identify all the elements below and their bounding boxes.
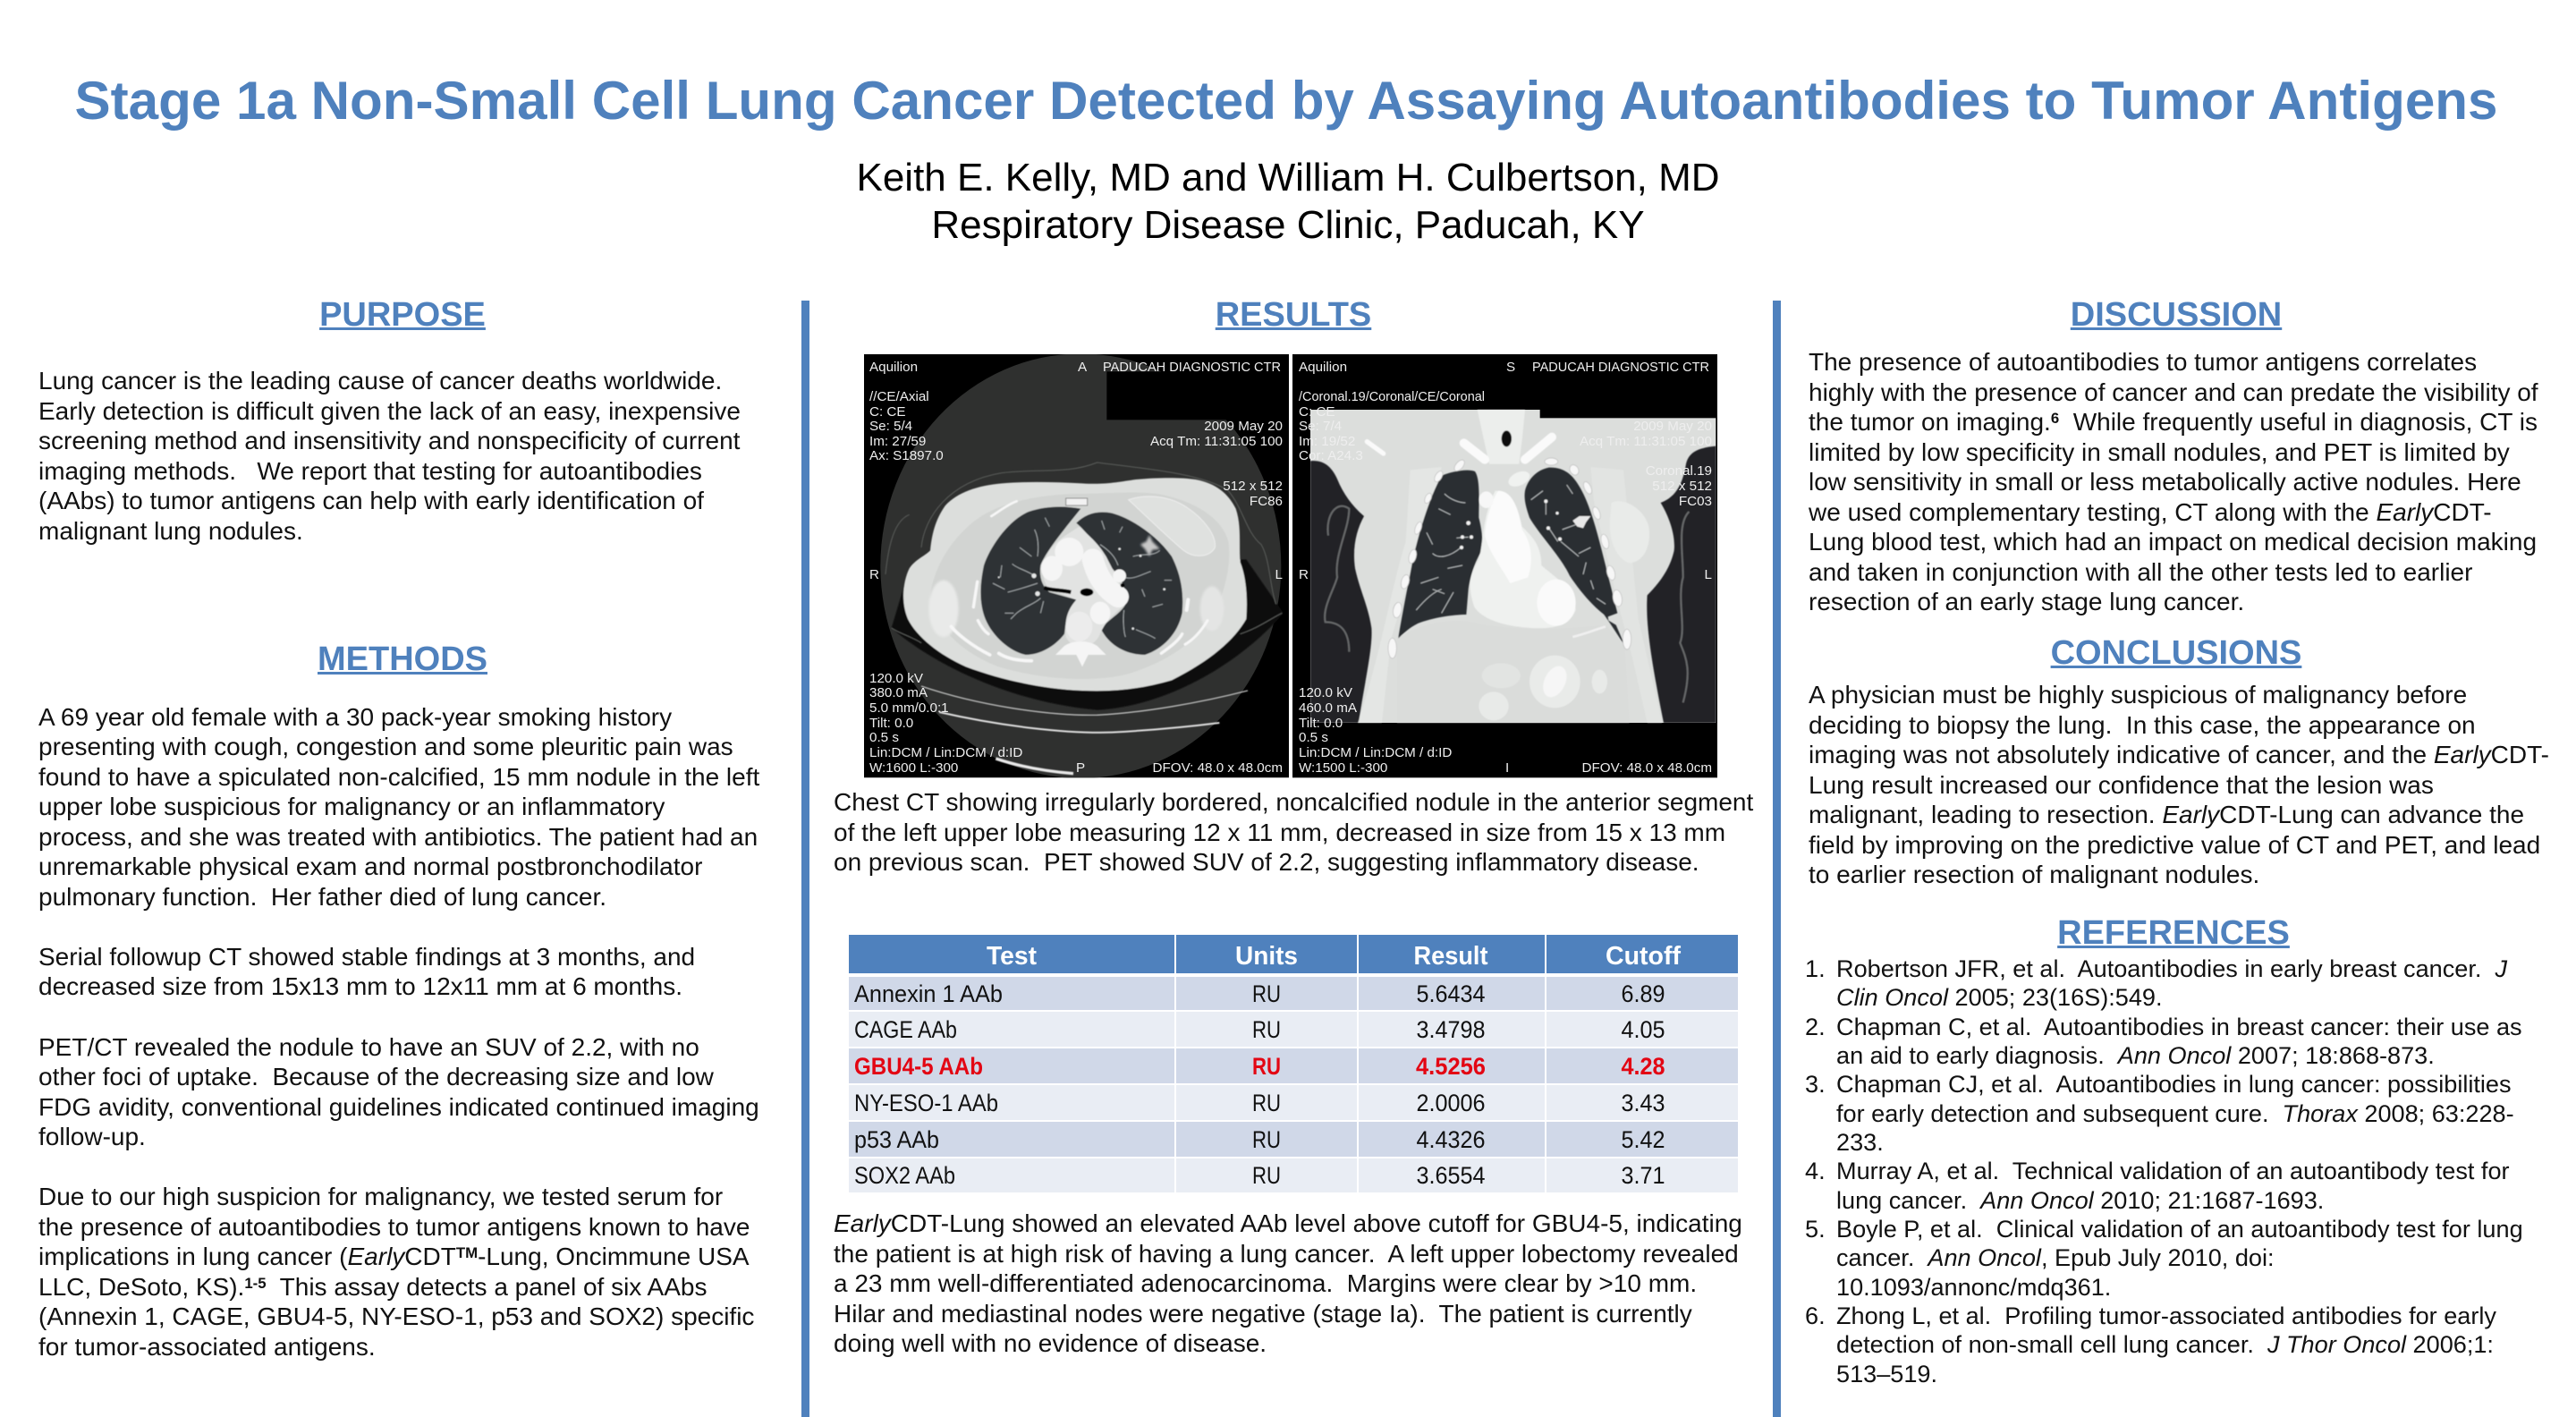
CT annotations: W:1500 L:-300 xyxy=(1299,760,1387,776)
panel: discussion xyxy=(1809,296,2538,615)
table rows: 3.43 xyxy=(1621,1090,1665,1116)
CT annotations: /Coronal.19/Coronal/CE/Coronal xyxy=(1299,389,1485,404)
CT annotations: W:1600 L:-300 xyxy=(869,760,958,776)
heading: results: RESULTS xyxy=(1216,296,1371,334)
dark side regions xyxy=(1310,461,1372,723)
text: methods body: A 69 year old female with a 30 pack-year smoking history presenting with cough, congestion and some pleuritic pain was found to have a spiculated non-calcified, 15 mm nodule in the left upper lobe suspicious for malignancy or an inflammatory process, and she was treated with antibiotics. The patient had an unremarkable physical exam and normal postbronchodilator pulmonary function. Her father died of lung cancer. Serial followup CT showed stable findings at 3 months, and decreased size from 15x13 mm to 12x11 mm at 6 months. PET/CT revealed the nodule to have an SUV of 2.2, with no other foci of uptake. Because of the decreasing size and low FDG avidity, conventional guidelines indicated continued imaging follow-up. Due to our high suspicion for malignancy, we tested serum for the presence of autoantibodies to tumor antigens known to have implications in lung cancer (EarlyCDTTM-Lung, Oncimmune USA LLC, DeSoto, KS).1-5 This assay detects a panel of six AAbs (Annexin 1, CAGE, GBU4-5, NY-ESO-1, p53 and SOX2) specific for tumor-associated antigens. xyxy=(38,703,759,1361)
text: reference list: Robertson JFR, et al. Autoantibodies in early breast cancer. J Clin Oncol 2005; 23(16S):549. Chapman C, et al. Autoantibodies in breast cancer: their use as an aid to early diagnosis. Ann Oncol 2007; 18:868-873. Chapman CJ, et al. Autoantibodies in lung cancer: possibilities for early detection and subsequent cure. Thorax 2008; 63:228- 233. Murray A, et al. Technical validation of an autoantibody test for lung cancer. Ann Oncol 2010; 21:1687-1693. Boyle P, et al. Clinical validation of an autoantibody test for lung cancer. Ann Oncol, Epub July 2010, doi: 10.1093/annonc/mdq361. Zhong L, et al. Profiling tumor-associated antibodies for early detection of non-small cell lung cancer. J Thor Oncol 2006;1: 513–519. xyxy=(1836,955,2523,1387)
arm veins xyxy=(1325,506,1689,702)
lung vessels xyxy=(993,518,1172,639)
CT annotations: 460.0 mA xyxy=(1299,700,1358,716)
table rows: 4.4326 xyxy=(1417,1126,1485,1153)
panel: methods xyxy=(38,641,760,1361)
heading: methods: METHODS xyxy=(318,641,487,678)
table rows: 2.0006 xyxy=(1417,1090,1485,1116)
CT annotations: 2009 May 20 xyxy=(1204,419,1283,434)
CT annotations: PADUCAH DIAGNOSTIC CTR xyxy=(1103,360,1281,375)
text: discussion body: The presence of autoantibodies to tumor antigens correlates highly with the presence of cancer and can predate the visibility of the tumor on imaging.6 While frequently useful in diagnosis, CT is limited by low specificity in small nodules, and PET is limited by low sensitivity in small or less metabolically active nodules. Here we used complementary testing, CT along with the EarlyCDT- Lung blood test, which had an impact on medical decision making and taken in conjunction with all the other tests led to earlier resection of an early stage lung cancer. xyxy=(1809,348,2538,615)
highlighted row: GBU4-5: 4.5256 xyxy=(1416,1053,1486,1080)
heading: purpose: PURPOSE xyxy=(319,296,486,334)
skin fold lines xyxy=(886,462,1282,643)
heading: discussion: DISCUSSION xyxy=(2071,296,2282,334)
CT annotations: Im: 27/59 xyxy=(869,434,926,449)
table: autoantibody results xyxy=(849,935,1738,1192)
text: purpose body: Lung cancer is the leading cause of cancer deaths worldwide. Early detection is difficult given the lack of an easy, inexpensive screening method and insensitivity and nonspecificity of current imaging methods. We report that testing for autoantibodies (AAbs) to tumor antigens can help with early identification of malignant lung nodules. xyxy=(38,367,741,545)
CT annotations: R xyxy=(1299,567,1309,582)
text: CT caption: Chest CT showing irregularly bordered, noncalcified nodule in the anterior segment of the left upper lobe measuring 12 x 11 mm, decreased in size from 15 x 13 mm on previous scan. PET showed SUV of 2.2, suggesting inflammatory disease. xyxy=(834,788,1753,876)
CT annotations: 120.0 kV xyxy=(1299,685,1353,700)
CT annotations: 2009 May 20 xyxy=(1633,419,1712,434)
text: test interpretation: EarlyCDT-Lung showed an elevated AAb level above cutoff for GBU4-5, indicating the patient is at high risk of having a lung cancer. A left upper lobectomy revealed a 23 mm well-differentiated adenocarcinoma. Margins were clear by >10 mm. Hilar and mediastinal nodes were negative (stage Ia). The patient is currently doing well with no evidence of disease. xyxy=(834,1209,1742,1357)
CT annotations: Coronal.19 xyxy=(1646,463,1712,479)
CT annotations: Aquilion xyxy=(1299,360,1347,375)
table rows: 5.6434 xyxy=(1417,980,1485,1007)
authors and affiliation: Keith E. Kelly, MD and William H. Culbertson, MD xyxy=(856,156,1719,199)
highlighted row: GBU4-5: RU xyxy=(1252,1053,1281,1080)
column divider right xyxy=(1773,301,1781,1417)
authors and affiliation xyxy=(856,156,1719,247)
implant xyxy=(1129,496,1215,556)
heading: references: REFERENCES xyxy=(2057,914,2290,952)
table header: Units xyxy=(1235,942,1298,971)
CT annotations: Tilt: 0.0 xyxy=(1299,716,1343,731)
CT annotations: R xyxy=(869,567,879,582)
CT annotations: Se: 5/4 xyxy=(869,419,912,434)
CT annotations: L xyxy=(1705,567,1712,582)
CT annotations: Aquilion xyxy=(869,360,918,375)
chest CT images xyxy=(864,354,1717,778)
CT annotations: Lin:DCM / Lin:DCM / d:ID xyxy=(869,745,1022,760)
title: Stage 1a Non-Small Cell Lung Cancer Detected by Assaying Autoantibodies to Tumor Antigens xyxy=(75,71,2497,131)
table rows: RU xyxy=(1252,980,1281,1007)
CT annotations: Cor: A24.3 xyxy=(1299,448,1363,463)
CT annotations: Tilt: 0.0 xyxy=(869,716,913,731)
CT table lines xyxy=(921,686,1248,774)
CT annotations: Acq Tm: 11:31:05 100 xyxy=(1150,434,1283,449)
heart and great vessels xyxy=(1470,491,1576,628)
table rows: Annexin 1 AAb xyxy=(854,980,1003,1007)
implant xyxy=(1610,501,1649,563)
coronal CT scan xyxy=(1292,354,1717,777)
table rows: NY-ESO-1 AAb xyxy=(854,1090,998,1116)
CT annotations: C: CE xyxy=(1299,404,1335,420)
CT annotations xyxy=(869,360,1712,776)
table rows: 4.05 xyxy=(1621,1016,1665,1043)
table rows: 3.71 xyxy=(1621,1162,1665,1189)
table rows: 5.42 xyxy=(1621,1126,1665,1153)
highlighted row: GBU4-5 xyxy=(854,1053,1665,1080)
table rows: CAGE AAb xyxy=(854,1016,957,1043)
table header xyxy=(987,942,1681,971)
CT annotations: Lin:DCM / Lin:DCM / d:ID xyxy=(1299,745,1452,760)
abdomen xyxy=(1397,621,1630,723)
text: reference numbers: 1. 2. 3. 4. 5. 6. xyxy=(1805,955,1826,1329)
CT annotations: Ax: S1897.0 xyxy=(869,448,944,463)
CT annotations: S xyxy=(1506,360,1515,375)
heading: conclusions: CONCLUSIONS xyxy=(2051,634,2301,672)
authors and affiliation: Respiratory Disease Clinic, Paducah, KY xyxy=(931,203,1645,247)
lungs xyxy=(980,506,1080,655)
table rows: p53 AAb xyxy=(854,1126,939,1153)
table rows: 3.6554 xyxy=(1417,1162,1485,1189)
CT annotations: 512 x 512 xyxy=(1223,479,1283,494)
CT annotations: //CE/Axial xyxy=(869,389,929,404)
CT annotations: I xyxy=(1505,760,1509,776)
body xyxy=(903,478,1247,691)
CT annotations: Acq Tm: 11:31:05 100 xyxy=(1580,434,1712,449)
panel: conclusions xyxy=(1809,634,2549,888)
CT annotations: 0.5 s xyxy=(869,730,899,745)
CT annotations: 512 x 512 xyxy=(1652,479,1712,494)
CT annotations: DFOV: 48.0 x 48.0cm xyxy=(1153,760,1283,776)
CT annotations: 120.0 kV xyxy=(869,671,924,686)
CT annotations: DFOV: 48.0 x 48.0cm xyxy=(1582,760,1712,776)
table rows: RU xyxy=(1252,1016,1281,1043)
table rows: SOX2 AAb xyxy=(854,1162,955,1189)
CT annotations: 0.5 s xyxy=(1299,730,1328,745)
highlighted row: GBU4-5: GBU4-5 AAb xyxy=(854,1053,983,1080)
CT annotations: A xyxy=(1078,360,1088,375)
table rows: 3.4798 xyxy=(1417,1016,1485,1043)
lungs xyxy=(1398,471,1482,639)
text: conclusions body: A physician must be highly suspicious of malignancy before deciding to biopsy the lung. In this case, the appearance on imaging was not absolutely indicative of cancer, and the EarlyCDT- Lung result increased our confidence that the lesion was malignant, leading to resection. EarlyCDT-Lung can advance the field by improving on the predictive value of CT and PET, and lead to earlier resection of malignant nodules. xyxy=(1809,681,2549,888)
CT annotations: 380.0 mA xyxy=(869,685,928,700)
panel: references xyxy=(1805,914,2523,1387)
panel: results xyxy=(834,296,1753,1357)
table rows: RU xyxy=(1252,1126,1281,1153)
table rows: RU xyxy=(1252,1162,1281,1189)
CT annotations: P xyxy=(1076,760,1085,776)
rib chains xyxy=(1388,458,1631,658)
table rows: 6.89 xyxy=(1621,980,1665,1007)
lung vessels xyxy=(1416,485,1606,613)
highlighted row: GBU4-5: 4.28 xyxy=(1621,1053,1665,1080)
table rows xyxy=(854,980,1665,1189)
mediastinum xyxy=(1043,527,1125,647)
CT annotations: FC03 xyxy=(1679,494,1712,509)
nodule xyxy=(1140,535,1160,556)
dark crescent under the body xyxy=(892,559,1284,710)
table header: Test xyxy=(987,942,1037,971)
CT annotations: PADUCAH DIAGNOSTIC CTR xyxy=(1532,360,1709,375)
table rows: RU xyxy=(1252,1090,1281,1116)
nodule xyxy=(1572,516,1590,528)
CT annotations: Im: 19/52 xyxy=(1299,434,1355,449)
CT annotations: 5.0 mm/0.0:1 xyxy=(869,700,949,716)
CT annotations: C: CE xyxy=(869,404,906,420)
upper chest structures xyxy=(1478,410,1525,464)
CT annotations: Se: 7/4 xyxy=(1299,419,1342,434)
CT annotations: FC86 xyxy=(1250,494,1283,509)
panel: purpose xyxy=(38,296,741,545)
table header: Cutoff xyxy=(1606,942,1681,971)
axial CT scan xyxy=(864,353,1292,778)
ribs and sternum xyxy=(951,501,1208,661)
table header: Result xyxy=(1413,942,1488,971)
CT annotations: L xyxy=(1275,567,1283,582)
column divider left xyxy=(801,301,809,1417)
